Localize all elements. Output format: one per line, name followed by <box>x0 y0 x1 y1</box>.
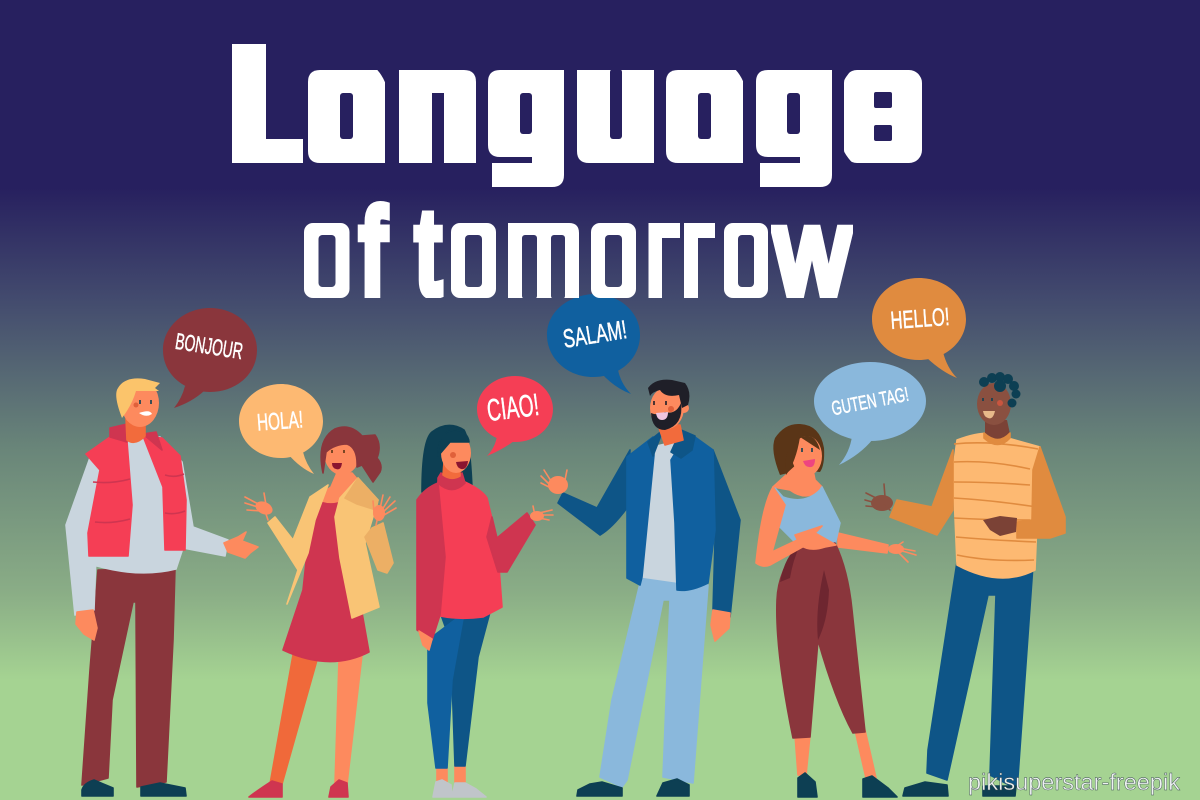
speech bubble: Guten Tag <box>814 362 926 465</box>
calves <box>795 730 876 778</box>
person 3: woman in red sweater <box>417 425 553 797</box>
jeans <box>927 562 1033 788</box>
sweater body <box>953 433 1040 578</box>
left sleeve <box>890 450 953 535</box>
title: Language <box>232 44 922 187</box>
eyes <box>654 401 666 405</box>
vest creases <box>93 474 185 523</box>
long hair <box>422 425 472 492</box>
speech bubble: Hola: HOLA! <box>256 406 304 437</box>
subtitle: of tomorrow: o <box>591 184 636 319</box>
person 6: man in striped sweater <box>865 372 1065 796</box>
jacket panel right <box>335 478 379 618</box>
speech bubble: Salam: SALAM! <box>561 314 629 354</box>
collar <box>984 433 1010 444</box>
smile <box>656 412 668 420</box>
title: Language: a <box>669 22 740 185</box>
subtitle: of tomorrow: o <box>304 184 350 319</box>
speech bubble: Hello: HELLO! <box>890 303 950 335</box>
face <box>792 436 822 476</box>
vest collar <box>110 424 162 450</box>
speech bubble: Hola <box>239 384 323 474</box>
mouth <box>803 459 815 467</box>
neck <box>658 425 683 445</box>
vest right <box>143 436 186 550</box>
curly hair <box>979 372 1020 408</box>
head <box>324 431 360 475</box>
cheeks <box>668 406 674 412</box>
near arm <box>838 533 888 553</box>
title: Language: g <box>488 22 566 185</box>
subtitle: of tomorrow: o <box>723 184 769 319</box>
title: Language: L <box>230 23 302 187</box>
neck and chest <box>773 465 822 496</box>
subtitle: of tomorrow <box>304 201 853 298</box>
leggings far <box>440 612 490 766</box>
sweater <box>66 437 228 615</box>
sweater body <box>438 482 502 618</box>
speech bubble: Bonjour <box>163 308 257 408</box>
left hand <box>419 631 432 650</box>
shoes <box>82 780 186 796</box>
shoes <box>798 773 897 797</box>
image credit: pikisuperstar-freepik <box>968 769 1180 795</box>
fringe <box>438 430 469 456</box>
head <box>977 383 1011 425</box>
shoes <box>433 780 486 797</box>
neck <box>985 420 1010 441</box>
subtitle: of tomorrow: r <box>647 184 675 319</box>
right sleeve <box>487 513 535 572</box>
right hand <box>373 495 396 525</box>
title: Language: u <box>577 22 654 185</box>
lower hand <box>711 610 730 641</box>
stripes <box>954 443 1038 560</box>
hand on waist <box>795 526 836 549</box>
left hand <box>76 610 97 640</box>
trouser folds <box>780 545 829 640</box>
subtitle: of tomorrow: t <box>416 184 440 320</box>
hand on chest <box>983 516 1017 536</box>
shoulder shade <box>345 478 378 510</box>
speech bubble: Bonjour: BONJOUR <box>174 328 245 364</box>
neck and chest <box>316 473 358 502</box>
beard <box>651 403 681 430</box>
person 5: woman in blue top <box>756 424 916 797</box>
raised hand <box>541 470 568 494</box>
top <box>775 487 840 548</box>
person 4: bearded man in blue jacket <box>541 380 740 796</box>
right hand <box>224 532 258 558</box>
speech bubble: Hello <box>872 278 966 378</box>
jacket left sleeve and panel <box>268 485 328 604</box>
speech bubble: Ciao: CIAO! <box>485 387 541 428</box>
trousers <box>777 543 865 738</box>
cheek <box>997 400 1003 406</box>
head <box>650 387 684 429</box>
eyes <box>140 400 151 404</box>
hand open <box>865 484 893 511</box>
t-shirt <box>642 440 683 582</box>
far sleeve <box>558 450 630 535</box>
cheek <box>134 402 138 408</box>
smile <box>983 411 995 418</box>
title: Language: a <box>310 22 382 185</box>
collar <box>438 473 465 490</box>
title: Language: g <box>756 22 834 185</box>
left sleeve <box>417 483 445 640</box>
smile <box>139 411 152 416</box>
mouth <box>456 461 468 469</box>
subtitle: of tomorrow: w <box>774 184 850 319</box>
speech bubble: Guten Tag: GUTEN TAG! <box>830 384 911 420</box>
title: Language: e <box>848 22 918 185</box>
eyes <box>802 448 812 452</box>
collar <box>648 430 695 458</box>
left hand <box>245 493 275 520</box>
leggings near <box>428 613 464 768</box>
shoes <box>249 780 348 797</box>
jacket left panel <box>627 437 654 585</box>
jacket sleeve right <box>365 523 393 573</box>
blonde hair <box>116 378 160 418</box>
jacket right panel <box>671 437 715 590</box>
subtitle: of tomorrow: f <box>360 184 387 319</box>
fringe <box>785 436 820 475</box>
hand open <box>888 542 916 562</box>
hair <box>648 380 689 408</box>
vest left <box>86 437 132 556</box>
eyes <box>983 398 992 401</box>
right hand <box>530 506 553 521</box>
speech bubble: Ciao <box>477 376 553 456</box>
near sleeve <box>702 450 740 617</box>
open mouth <box>332 463 342 469</box>
person 2: woman in red dress <box>245 427 396 797</box>
hair and ponytail <box>321 427 381 482</box>
subtitle: of tomorrow: o <box>451 184 496 319</box>
trousers <box>82 568 175 787</box>
eyes <box>332 450 344 453</box>
shoes <box>577 779 689 796</box>
speech bubble: Salam <box>547 294 640 394</box>
person 1: man in red vest <box>66 378 258 796</box>
legs <box>270 655 317 784</box>
subtitle: of tomorrow: r <box>683 184 710 319</box>
ankles <box>437 762 465 784</box>
left arm <box>756 487 808 566</box>
face <box>441 433 471 473</box>
hair back <box>773 424 824 475</box>
ear <box>679 403 689 413</box>
dress <box>283 497 369 662</box>
neck <box>443 462 460 478</box>
head <box>121 379 159 427</box>
title: Language: n <box>399 22 476 185</box>
right sleeve <box>1017 447 1065 538</box>
shoes <box>903 782 1016 796</box>
neck <box>126 418 145 442</box>
subtitle: of tomorrow: m <box>507 185 580 320</box>
cheek <box>450 452 456 458</box>
trousers <box>600 575 708 787</box>
